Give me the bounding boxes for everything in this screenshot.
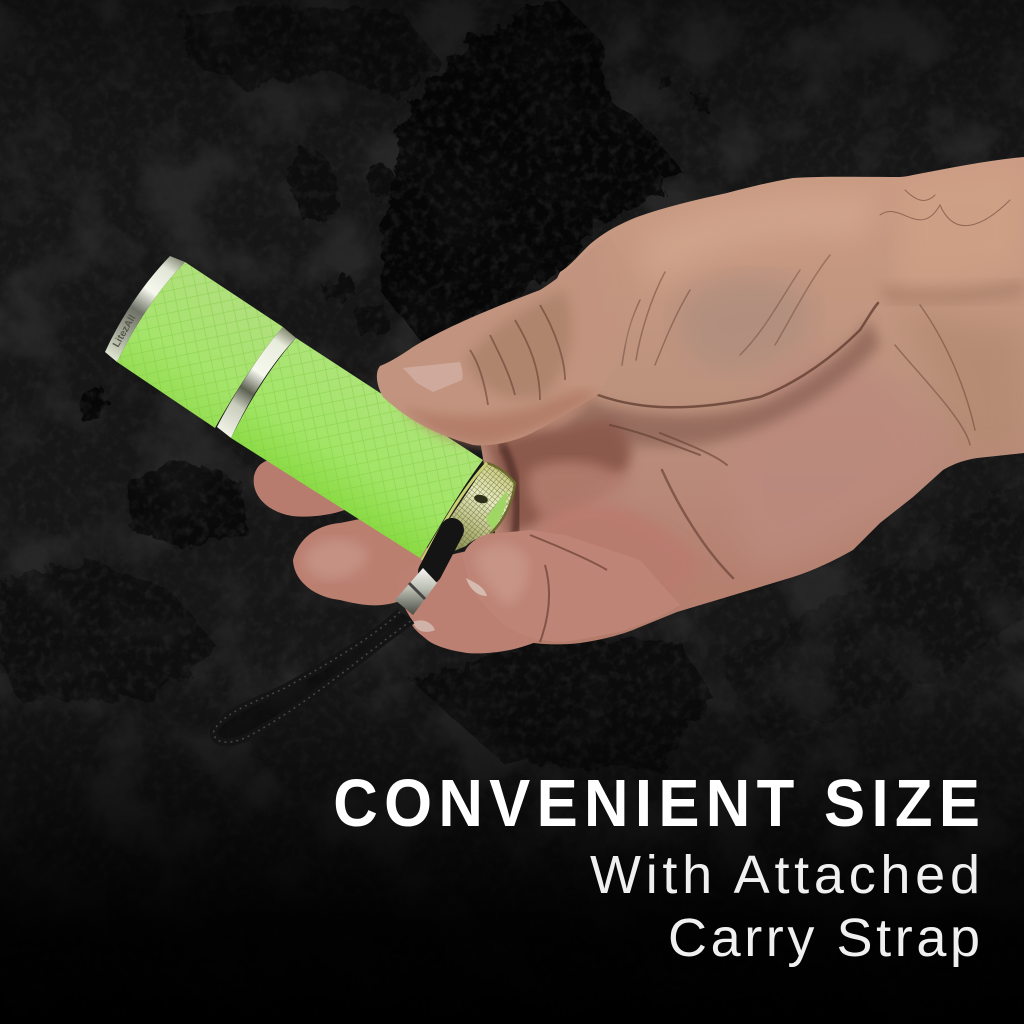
finger pressing the strap xyxy=(463,530,680,642)
finger with nail xyxy=(397,548,540,653)
subheading line two: Carry Strap xyxy=(668,908,980,968)
palm hollow xyxy=(480,420,631,535)
dark seam near cap xyxy=(500,440,518,535)
flashlight xyxy=(105,256,515,560)
head silver ring with brand: LitezAll xyxy=(111,313,138,350)
pad highlight xyxy=(475,544,528,605)
wrist tendon shadow xyxy=(880,280,1024,304)
caption xyxy=(333,766,980,968)
ferrule groove xyxy=(409,583,425,599)
carry strap xyxy=(214,530,452,742)
subheading line one: With Attached xyxy=(590,845,980,905)
finger tip behind flashlight xyxy=(254,459,345,517)
finger ridge in hollow xyxy=(528,461,630,520)
rear body section xyxy=(231,338,483,558)
pink heel of palm xyxy=(759,524,814,552)
front body section xyxy=(117,262,283,428)
knuckle crease xyxy=(530,535,607,642)
headline: CONVENIENT SIZE xyxy=(333,766,980,841)
thumb nail xyxy=(403,362,463,392)
hand: back, palm and wrist xyxy=(470,150,1024,660)
creases xyxy=(598,190,1010,612)
shadow below thumb fold xyxy=(560,320,880,446)
head silver ring with brand xyxy=(105,256,185,362)
strap ferrule xyxy=(395,568,437,615)
thumb underside tone xyxy=(400,391,598,445)
thumb shape xyxy=(377,236,640,445)
wrinkled knuckle xyxy=(465,290,572,399)
thumb wrinkles xyxy=(470,305,565,405)
strap upper section xyxy=(430,530,452,572)
upper hand highlight xyxy=(653,206,854,268)
middle silver ring xyxy=(217,327,296,438)
strap loop xyxy=(214,612,412,742)
index finger pad highlight xyxy=(304,539,367,579)
strap weave highlight xyxy=(214,612,412,742)
bluish back of hand patch xyxy=(677,276,812,370)
lower finger base tone xyxy=(541,509,667,550)
side nail xyxy=(466,578,487,596)
wrist tone xyxy=(903,159,1004,266)
fingernail xyxy=(413,620,435,632)
thumb xyxy=(377,236,640,445)
lower wrist xyxy=(928,327,1022,461)
knurled end cap xyxy=(422,463,515,560)
index finger under flashlight xyxy=(293,515,430,605)
